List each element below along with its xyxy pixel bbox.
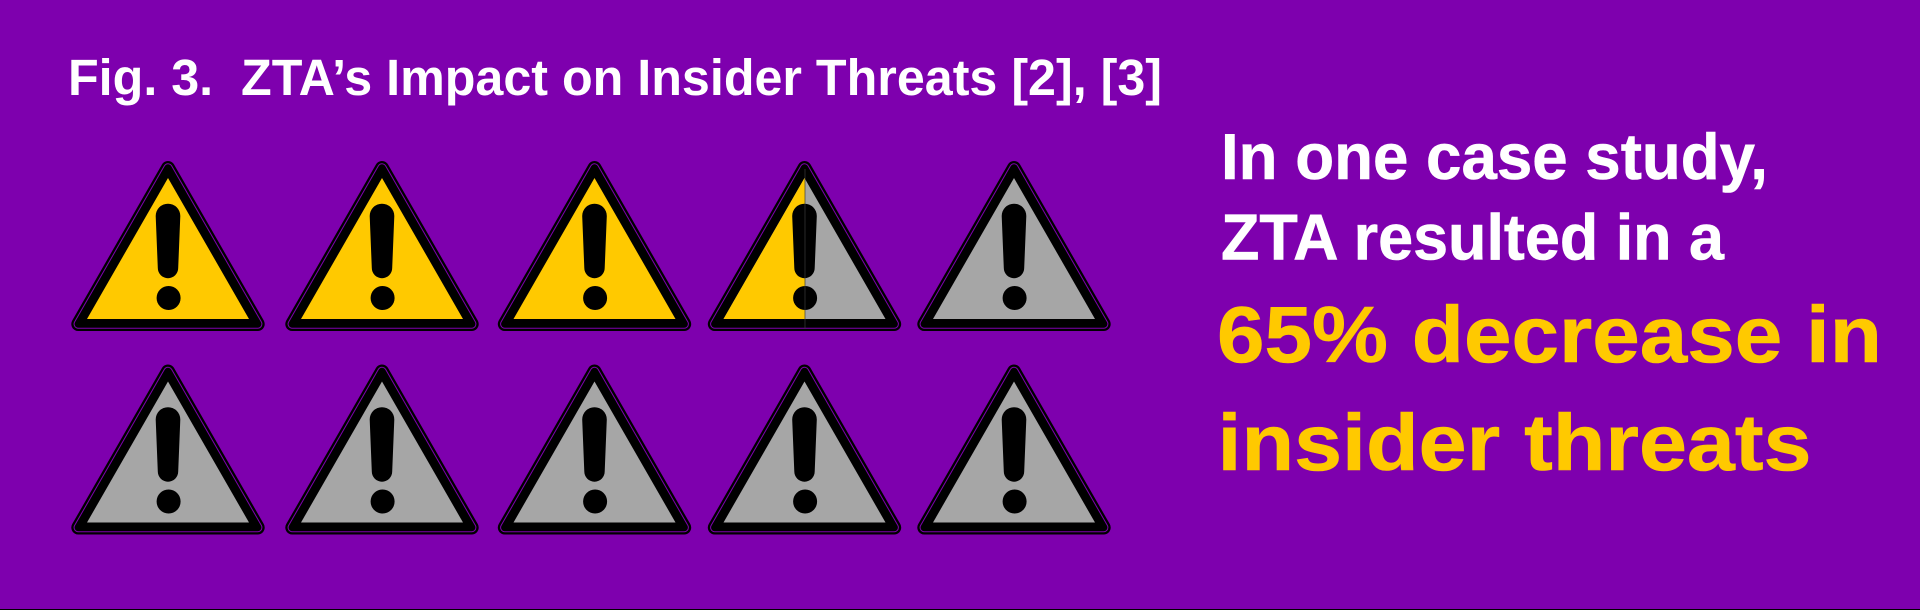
icon: warning triangle 4, half yellow half grey: [715, 168, 894, 329]
icon: warning triangle 1, yellow: [78, 168, 258, 324]
text: case study line 1: In one case study,: [1221, 120, 1768, 193]
icon: warning triangle 10, grey: [924, 372, 1104, 528]
text: highlighted statistic line 1: 65% decrease in: [1217, 290, 1882, 379]
icon: warning triangle 8, grey: [505, 372, 684, 528]
text: case study line 2: ZTA resulted in a: [1221, 200, 1725, 274]
icon: warning triangle 9, grey: [715, 372, 894, 528]
callout text: [1217, 120, 1882, 487]
icon grid: warning triangles, 3.5 of 10 highlighted: [78, 168, 1104, 528]
icon: warning triangle 6, grey: [78, 372, 258, 528]
title: Fig. 3. ZTA’s Impact on Insider Threats [2], [3]: [68, 49, 1162, 106]
icon: warning triangle 3, yellow: [505, 168, 684, 324]
text: highlighted statistic line 2: insider threats: [1218, 398, 1812, 487]
icon: warning triangle 2, yellow: [292, 168, 472, 324]
icon: warning triangle 5, grey: [924, 168, 1104, 324]
icon: warning triangle 7, grey: [292, 372, 472, 528]
